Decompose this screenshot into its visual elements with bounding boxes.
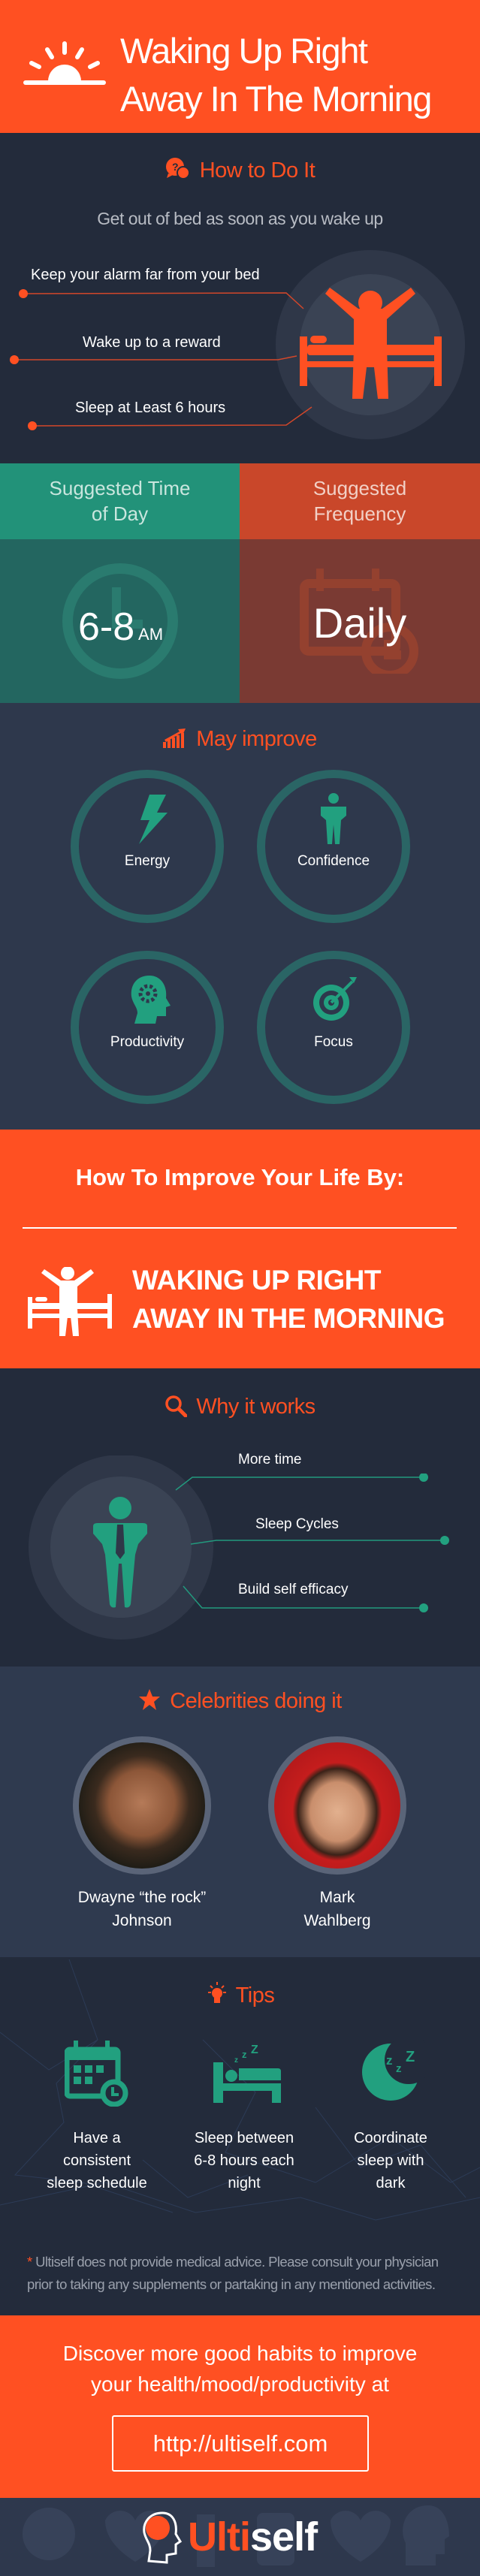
tip 2: 6-8 hours (194, 2044, 294, 2191)
name: dwayne johnson: Johnson (112, 1912, 172, 1929)
celebrity photo: mark wahlberg (268, 1736, 406, 1875)
reason 1: More time (238, 1452, 301, 1467)
icon: brain head (143, 2511, 182, 2564)
header: suggested time: of Day (92, 502, 148, 525)
banner title (132, 1265, 445, 1334)
benefit: focus (257, 951, 410, 1104)
tip 2: 6-8 hours: night (228, 2175, 261, 2191)
reason 3: Build self efficacy (238, 1582, 348, 1597)
header: suggested time (0, 463, 240, 539)
heading: why it works: Why it works (196, 1395, 315, 1419)
url box (112, 2415, 369, 2472)
value: 6-8 AM: 6-8 AM (78, 605, 163, 649)
icon: head gear (131, 976, 171, 1024)
benefit: productivity: Productivity (110, 1034, 184, 1050)
icon: target (313, 977, 357, 1021)
tip 3: coordinate with dark: Coordinate (354, 2130, 427, 2146)
icon: moon zzz: Z (406, 2049, 415, 2065)
name: dwayne johnson: Dwayne “the rock” (78, 1889, 206, 1906)
circle with confident person (29, 1455, 213, 1639)
heading: tips (208, 1982, 274, 2007)
panel: how to do it (0, 133, 480, 463)
tip 1: consistent schedule: Have a (73, 2130, 121, 2146)
banner title: WAKING UP RIGHT (132, 1265, 381, 1296)
benefit: focus: Focus (314, 1034, 353, 1050)
tip 2: 6-8 hours: 6-8 hours each (194, 2152, 294, 2169)
name: mark wahlberg: Mark (320, 1889, 355, 1906)
panel: tips (0, 1957, 480, 2315)
heading: how to do it: How to Do It (200, 158, 315, 182)
panel: may improve (0, 703, 480, 1130)
header banner (0, 0, 480, 133)
heading: tips: Tips (236, 1983, 274, 2007)
icon: clock (62, 563, 178, 679)
value: daily: Daily (313, 599, 406, 647)
title: Waking Up Right (120, 31, 367, 71)
step 2: Wake up to a reward (83, 334, 221, 351)
heading: may improve: May improve (196, 727, 317, 751)
icon: bed zzz: z (242, 2049, 247, 2060)
tip 1: consistent schedule: sleep schedule (47, 2175, 147, 2191)
tip 3: coordinate with dark: dark (376, 2175, 405, 2191)
banner title: AWAY IN THE MORNING (132, 1303, 445, 1334)
url box: http://ultiself.com (153, 2430, 328, 2457)
panel: suggested frequency (240, 463, 480, 703)
header: suggested time: Suggested Time (50, 477, 190, 499)
panel: why it works (0, 1368, 480, 1667)
name: mark wahlberg: Wahlberg (303, 1912, 371, 1929)
cta text: Discover more good habits to improve (63, 2342, 417, 2365)
name: dwayne johnson (78, 1889, 206, 1929)
reason lines (176, 1474, 449, 1612)
title (120, 31, 431, 119)
icon: lightning (139, 795, 168, 844)
tip 2: 6-8 hours: Sleep between (195, 2130, 294, 2146)
header: suggested frequency: Frequency (314, 502, 406, 525)
logo text: Ultiself (188, 2514, 317, 2559)
disclaimer: * Ultiself does not provide medical advice. Please consult your physician (27, 2254, 439, 2270)
benefit: energy (71, 770, 224, 923)
tip 3: coordinate with dark: sleep with (358, 2152, 424, 2169)
panel: celebrities (0, 1667, 480, 1957)
cta text (63, 2342, 417, 2396)
circle with person on bed (276, 250, 465, 439)
title: Away In The Morning (120, 79, 431, 119)
tip 1: consistent schedule (47, 2041, 147, 2191)
decorative footer icons (23, 2505, 449, 2567)
reason 2: Sleep Cycles (255, 1516, 339, 1532)
benefit: energy: Energy (125, 853, 170, 869)
network background (0, 1959, 480, 2220)
subtitle: Get out of bed as soon as you wake up (97, 209, 383, 228)
banner heading: How To Improve Your Life By: (76, 1164, 404, 1190)
icon: person on bed white (28, 1267, 112, 1336)
step lines (10, 289, 312, 430)
heading: how to do it: ? (172, 161, 178, 173)
step 1: Keep your alarm far from your bed (31, 267, 260, 283)
disclaimer (27, 2254, 439, 2292)
benefit: productivity (71, 951, 224, 1104)
footer (0, 2498, 480, 2576)
step 3: Sleep at Least 6 hours (75, 400, 225, 416)
name: mark wahlberg (303, 1889, 371, 1929)
icon: moon zzz: z (386, 2053, 392, 2068)
icon: moon zzz (362, 2044, 418, 2101)
banner: how to improve your life (0, 1130, 480, 1368)
icon: moon zzz: z (396, 2062, 401, 2075)
icon: calendar (300, 569, 418, 674)
icon: confident person (321, 793, 346, 844)
tip 1: consistent schedule: consistent (63, 2152, 131, 2169)
header: suggested frequency: Suggested (313, 477, 406, 499)
heading: celebrities: Celebrities doing it (170, 1689, 342, 1713)
header: suggested frequency (240, 463, 480, 539)
icon: bed zzz (213, 2044, 281, 2103)
cta text: your health/mood/productivity at (91, 2372, 389, 2396)
logo: ultiself (143, 2511, 318, 2564)
disclaimer: prior to taking any supplements or partaking in any mentioned activities. (27, 2276, 435, 2292)
benefit: confidence (257, 770, 410, 923)
icon: sunrise (23, 41, 106, 85)
tip 3: coordinate with dark (354, 2044, 427, 2191)
benefit: confidence: Confidence (297, 853, 370, 869)
icon: bed zzz: z (234, 2056, 238, 2065)
panel: suggested time (0, 463, 240, 703)
celebrity photo: dwayne johnson (73, 1736, 211, 1875)
icon: calendar clock (65, 2041, 128, 2107)
call to action (0, 2315, 480, 2498)
